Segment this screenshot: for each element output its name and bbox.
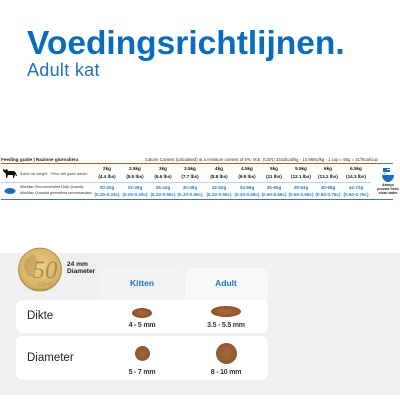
icon: water tap and bowl bbox=[382, 168, 394, 182]
kitten kibble side view bbox=[132, 308, 152, 318]
quantities row: (0.33-0.50c) bbox=[177, 192, 203, 196]
diameter label: Diameter bbox=[27, 352, 74, 364]
kitten column heading: Kitten bbox=[130, 278, 154, 288]
weights row: (14.3 lbs) bbox=[346, 174, 366, 179]
water note: Always bbox=[382, 182, 394, 186]
dikte label: Dikte bbox=[27, 310, 53, 322]
subtitle: Adult kat bbox=[27, 60, 100, 80]
quantity label: Min/Max Recommended Daily Quantity bbox=[20, 185, 84, 189]
quantities row: 40-68g bbox=[321, 184, 335, 190]
quantities row: (0.25-0.33c) bbox=[122, 192, 148, 196]
title: Voedingsrichtlijnen. bbox=[27, 25, 345, 62]
icon: 50 cent coin: CENT bbox=[38, 282, 53, 288]
table heading: Feeding guide | Razione giornaliera bbox=[1, 157, 78, 162]
weights row: (7.7 lbs) bbox=[181, 174, 199, 179]
quantities row: (0.50-0.66c) bbox=[261, 192, 287, 196]
row: dikte bbox=[16, 300, 268, 333]
coin diameter label: 24 mm bbox=[67, 261, 88, 268]
adult diameter: 8 - 10 mm bbox=[211, 368, 241, 376]
weights row: (11 lbs) bbox=[266, 174, 282, 179]
quantities row: 22-38g bbox=[128, 184, 142, 190]
quantities row: 44-72g bbox=[349, 184, 363, 190]
kitten kibble top view bbox=[135, 346, 150, 361]
water note: clean water bbox=[379, 191, 397, 195]
adult column heading: Adult bbox=[215, 278, 237, 288]
weights row: (5.5 lbs) bbox=[126, 174, 144, 179]
icon: cat silhouette bbox=[3, 169, 17, 178]
coin diameter label bbox=[67, 261, 96, 274]
icon: 50 cent coin: 50 bbox=[32, 257, 58, 284]
weights row bbox=[98, 166, 366, 179]
quantities row: 32-52g bbox=[212, 184, 226, 190]
quantities row: (0.50-0.75c) bbox=[343, 192, 369, 196]
weights row: (4.4 lbs) bbox=[98, 174, 116, 179]
quantities row: (0.50-0.66c) bbox=[288, 192, 314, 196]
weights row: 3kg bbox=[159, 166, 167, 171]
feeding guide table bbox=[1, 157, 399, 200]
calorie content note: Calorie Content (calculated) at a moisture content of 6%: M.E. (CEN) 3341kcal/kg - 13.98MJ/kg - 1 cup = 95g = 317kcal/cup bbox=[145, 157, 378, 162]
icon: food bowl bbox=[4, 188, 16, 194]
quantities row: (0.33-0.66c) bbox=[234, 192, 260, 196]
weights row: (13.2 lbs) bbox=[318, 174, 338, 179]
weights row: (6.6 lbs) bbox=[154, 174, 172, 179]
adult thickness: 3.5 - 5.5 mm bbox=[207, 322, 245, 328]
quantities row: 36-60g bbox=[267, 184, 281, 190]
quantities row: 30-48g bbox=[183, 184, 197, 190]
weights row: 6.5kg bbox=[350, 166, 362, 171]
weights row: 2kg bbox=[103, 166, 111, 171]
quantities row bbox=[94, 184, 369, 197]
kitten thickness: 4 - 5 mm bbox=[129, 322, 155, 328]
quantity label: Min/Max Quantità giornaliera raccomandata bbox=[20, 190, 92, 194]
water note bbox=[377, 182, 399, 195]
adult kibble side view bbox=[211, 306, 241, 317]
quantities row: 38-64g bbox=[294, 184, 308, 190]
icon: 50 cent coin bbox=[18, 248, 62, 292]
quantities row: (0.50-0.75c) bbox=[315, 192, 341, 196]
quantities row: 20-32g bbox=[100, 184, 114, 190]
weights row: 6kg bbox=[324, 166, 332, 171]
quantities row: (0.33-0.50c) bbox=[206, 192, 232, 196]
weights row: 5.5kg bbox=[295, 166, 307, 171]
quantities row: 34-56g bbox=[240, 184, 254, 190]
adult kibble top view bbox=[216, 343, 237, 364]
tab: kitten bbox=[100, 268, 184, 302]
weights row: (8.8 lbs) bbox=[210, 174, 228, 179]
weights row: (12.1 lbs) bbox=[291, 174, 311, 179]
weights row: 4kg bbox=[215, 166, 223, 171]
weights row: 5kg bbox=[270, 166, 278, 171]
row: diameter bbox=[16, 336, 268, 380]
water note: provide fresh bbox=[377, 187, 399, 191]
kitten diameter: 5 - 7 mm bbox=[129, 368, 155, 376]
tab: adult bbox=[185, 268, 268, 302]
quantities row: (0.25-0.33c) bbox=[94, 192, 120, 196]
adult cat weight label: Adult cat weight - Peso del gatto adulto bbox=[20, 171, 87, 176]
panel: kibble size comparison bbox=[0, 253, 400, 395]
weights row: 2.5kg bbox=[129, 166, 141, 171]
quantity label bbox=[20, 185, 92, 195]
quantities row: (0.33-0.50c) bbox=[150, 192, 176, 196]
weights row: 4.5kg bbox=[241, 166, 253, 171]
coin diameter label: Diameter bbox=[67, 268, 95, 274]
weights row: (9.9 lbs) bbox=[238, 174, 256, 179]
weights row: 3.5kg bbox=[184, 166, 196, 171]
quantities row: 26-42g bbox=[156, 184, 170, 190]
